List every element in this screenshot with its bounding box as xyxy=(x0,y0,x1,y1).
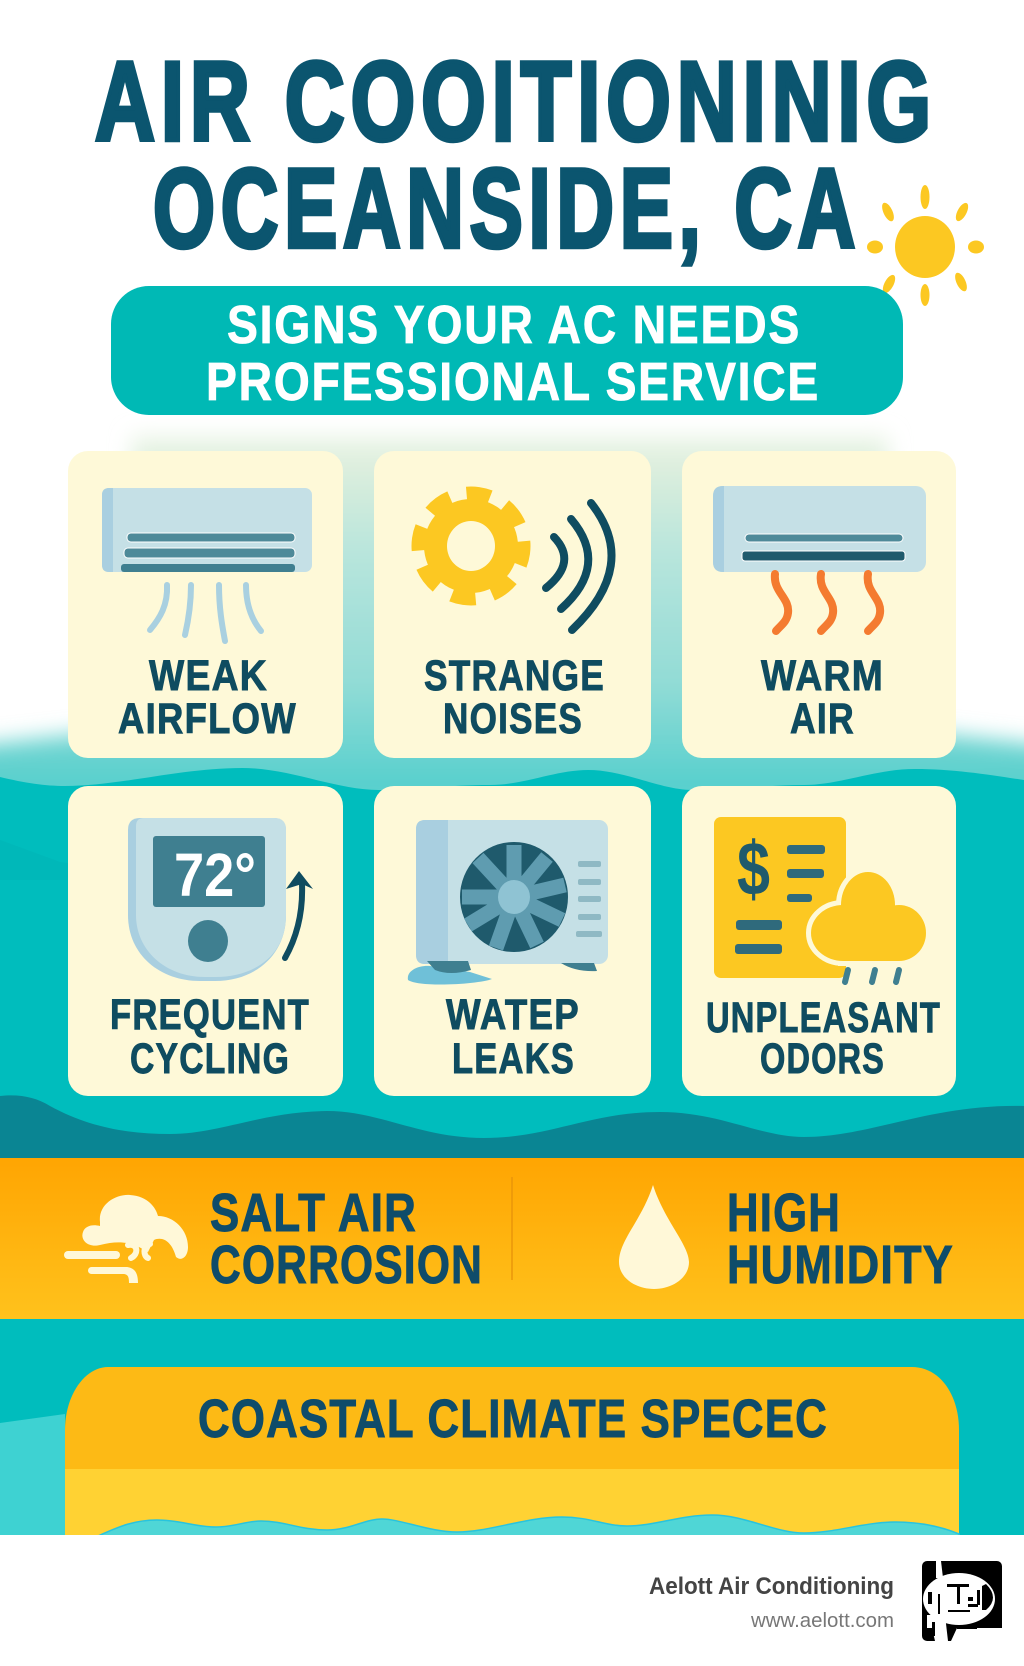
label: salt air corrosion xyxy=(210,1183,483,1295)
panel heading: COASTAL CLIMATE SPECEC xyxy=(198,1389,828,1449)
icon: salt air cloud and wind xyxy=(64,1195,188,1283)
subtitle banner: SIGNS YOUR AC NEEDS xyxy=(227,295,801,355)
footer xyxy=(0,1535,1024,1666)
icon: thermostat with arrow xyxy=(128,818,313,981)
icon: bill and cloud: $ xyxy=(737,827,770,912)
label: salt air corrosion: SALT AIR xyxy=(210,1183,417,1243)
card: weak airflow xyxy=(68,451,343,758)
icon: sun xyxy=(867,185,984,306)
logo xyxy=(922,1561,1002,1641)
title xyxy=(95,39,937,271)
subtitle banner xyxy=(111,286,903,415)
icon: outdoor unit leaking xyxy=(408,820,608,985)
icon: AC unit with warm air xyxy=(713,486,926,631)
card: water leaks xyxy=(374,786,651,1096)
card: water leaks: LEAKS xyxy=(452,1035,575,1083)
card: weak airflow: AIRFLOW xyxy=(118,695,297,743)
card: unpleasant odors: UNPLEASANT xyxy=(706,994,941,1042)
card: warm air: WARM xyxy=(761,652,884,700)
card: frequent cycling: CYCLING xyxy=(130,1035,290,1083)
icon: AC unit with weak airflow xyxy=(102,488,312,641)
card: frequent cycling: FREQUENT xyxy=(110,991,310,1039)
card: unpleasant odors: ODORS xyxy=(760,1035,885,1083)
footer company text: Aelott Air Conditioning xyxy=(649,1573,894,1600)
orange band: coastal factors xyxy=(0,1158,1024,1319)
card: strange noises xyxy=(374,451,651,758)
subtitle banner: PROFESSIONAL SERVICE xyxy=(206,352,820,412)
label: high humidity: HUMIDITY xyxy=(727,1235,954,1295)
card: frequent cycling xyxy=(68,786,343,1096)
card: strange noises: NOISES xyxy=(443,695,583,743)
label: salt air corrosion: CORROSION xyxy=(210,1235,483,1295)
panel: coastal climate xyxy=(65,1367,959,1536)
card: warm air: AIR xyxy=(790,695,855,743)
card: strange noises: STRANGE xyxy=(424,652,605,700)
label: high humidity: HIGH xyxy=(727,1183,841,1243)
card: water leaks: WATEP xyxy=(446,991,580,1039)
label: high humidity xyxy=(727,1183,954,1295)
icon: thermostat with arrow: 72° xyxy=(174,841,256,909)
icon: bill and cloud xyxy=(714,817,926,982)
icon: humidity drop xyxy=(619,1185,689,1289)
footer company text: www.aelott.com xyxy=(750,1610,894,1632)
card: warm air xyxy=(682,451,956,758)
card: weak airflow: WEAK xyxy=(149,652,268,700)
card: unpleasant odors xyxy=(682,786,956,1096)
icon: gear with sound waves xyxy=(412,487,612,630)
footer company text xyxy=(649,1573,894,1632)
